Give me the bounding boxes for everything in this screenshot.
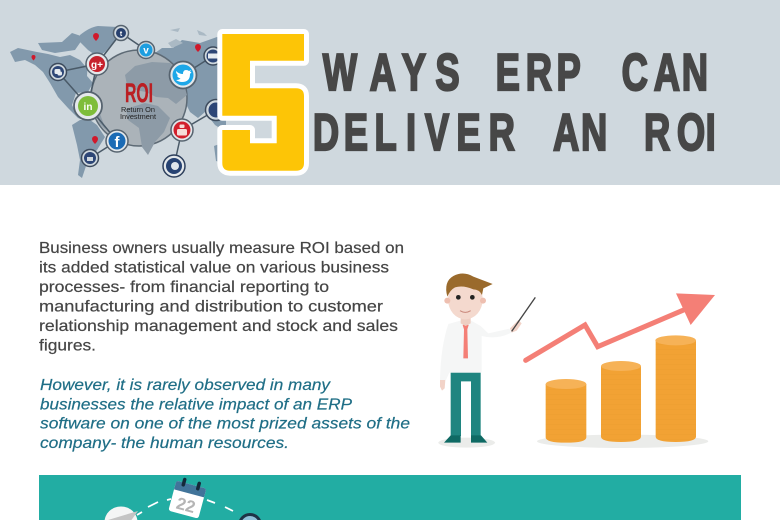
icon: facebook [106, 130, 128, 152]
big number 5 [222, 34, 304, 171]
map: pale islands [168, 28, 207, 48]
icon: small blue node: t [120, 31, 123, 38]
tie [463, 323, 469, 358]
icon: calendar: 22 [174, 494, 197, 517]
teal panel [39, 475, 741, 520]
intro paragraph: relationship management and stock and sales [39, 318, 398, 335]
icon: youtube [171, 119, 193, 141]
coin stack medium [601, 361, 641, 442]
intro paragraph: figures. [39, 338, 96, 354]
neck and head [461, 315, 471, 326]
network lines [58, 33, 216, 166]
coin stack large [655, 335, 696, 442]
central ROI circle [91, 50, 187, 146]
icon: google plus: g+ [91, 60, 103, 71]
italic paragraph: However, it is rarely observed in many [40, 377, 331, 394]
hand [440, 320, 522, 391]
pointer [512, 297, 535, 331]
icon: calendar [168, 476, 208, 519]
location pins [32, 33, 201, 144]
intro paragraph: processes- from financial reporting to [39, 279, 329, 296]
icon: magnifier [240, 514, 260, 520]
intro paragraph: Business owners usually measure ROI based on [39, 240, 404, 257]
growth arrow [526, 309, 687, 360]
icon: google plus [86, 53, 108, 75]
dashed arc [137, 499, 233, 515]
icon: L node [206, 100, 226, 120]
face [456, 295, 461, 300]
icon: small blue node [114, 26, 128, 40]
italic paragraph: company- the human resources. [40, 435, 289, 452]
icon: twitter [170, 62, 196, 88]
map: continents inside circle [92, 62, 187, 155]
icon: facebook: f [114, 134, 120, 151]
illustration: presenter and growth chart [438, 273, 715, 448]
ROI label [120, 78, 156, 121]
world map with ROI network [10, 26, 226, 178]
coin stack small [546, 379, 586, 443]
icon: speech bubble [104, 506, 138, 520]
italic paragraph: software on one of the most prized assets of the [40, 416, 410, 432]
shirt [440, 320, 511, 380]
icon: vimeo [138, 42, 154, 58]
map: continents [10, 26, 226, 178]
title: CAN [622, 42, 708, 102]
icon: linkedin: in [84, 102, 92, 113]
icon: briefcase [204, 47, 222, 65]
ROI label: Investment [120, 114, 156, 121]
intro paragraph: its added statistical value on various business [39, 260, 389, 276]
hair [446, 273, 493, 297]
title: ERP [496, 42, 581, 102]
icon: thumb [82, 150, 98, 166]
italic paragraph [40, 377, 410, 452]
icon: linkedin [74, 92, 102, 120]
ROI label: ROI [125, 78, 153, 108]
title: DELIVER [313, 102, 515, 162]
presenter [440, 273, 535, 443]
ROI label: Return On [121, 107, 155, 114]
icon: vimeo: v [143, 46, 149, 56]
icon: chat [50, 64, 66, 80]
italic paragraph: businesses the relative impact of an ERP [40, 396, 352, 413]
title: WAYS [323, 42, 460, 102]
icon: clock [163, 155, 185, 177]
intro paragraph: manufacturing and distribution to customer [39, 298, 384, 316]
trousers [451, 373, 481, 436]
shoes [444, 435, 487, 443]
header band [0, 0, 780, 185]
title: ROI [644, 102, 716, 162]
title: AN [553, 102, 607, 162]
title [313, 42, 716, 162]
intro paragraph [39, 240, 404, 354]
shadows [438, 435, 708, 448]
